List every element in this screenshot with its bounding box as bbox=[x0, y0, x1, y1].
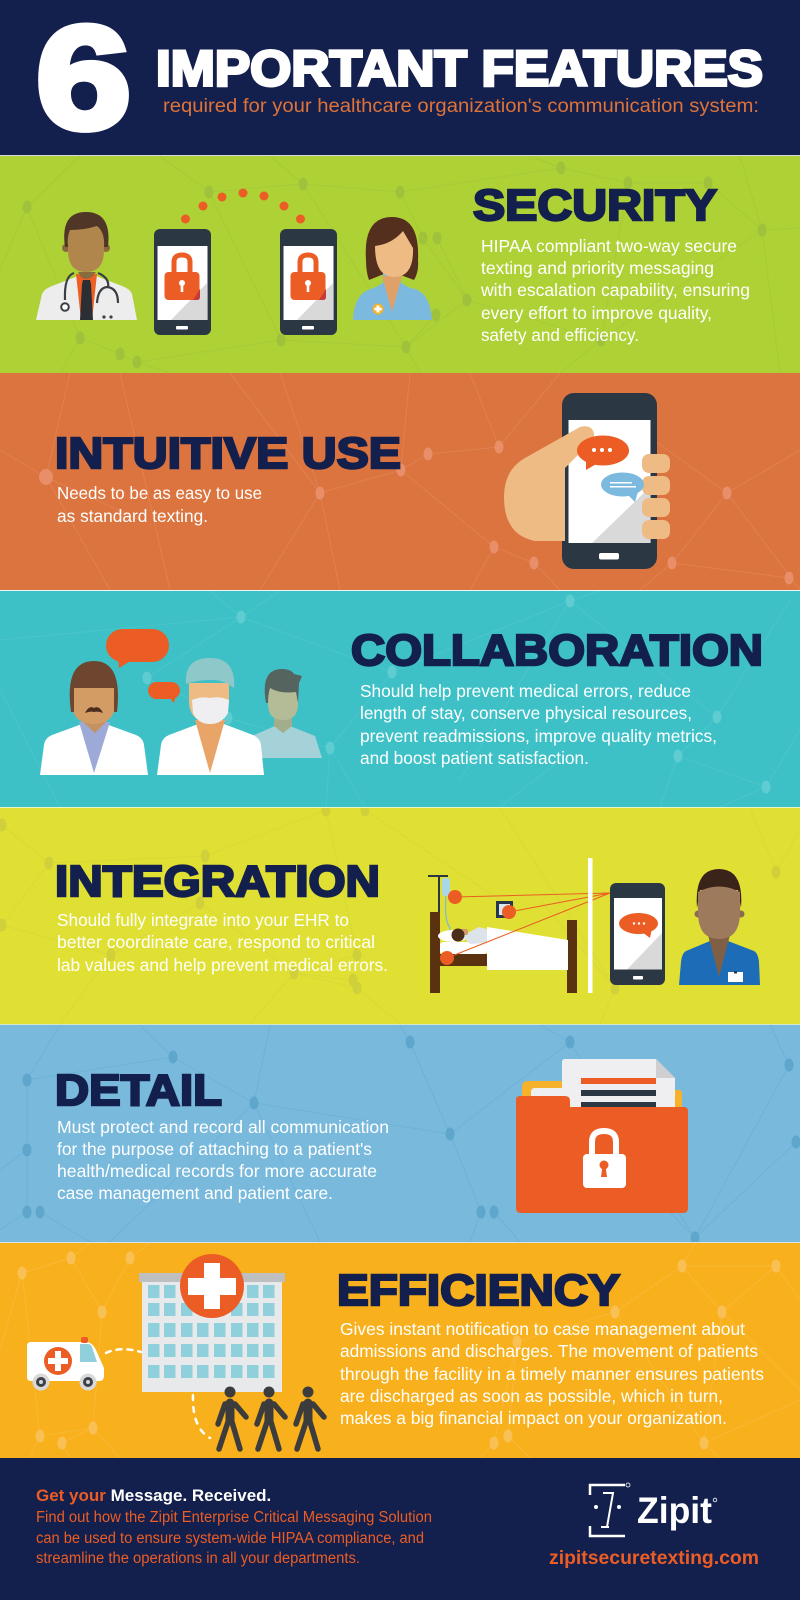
icon: locked folder bbox=[516, 1059, 688, 1213]
text: collaboration bbox=[360, 681, 717, 768]
icon: ambulance bbox=[27, 1337, 104, 1390]
text: security: with escalation capability, ensuring bbox=[480, 280, 750, 300]
icon: patient in hospital bed bbox=[428, 875, 610, 993]
faded clinician bbox=[247, 669, 322, 758]
text: security bbox=[480, 236, 750, 345]
panel: footer bbox=[0, 1458, 800, 1600]
panel: detail bbox=[0, 1024, 800, 1244]
text: integration: better coordinate care, respond to critical bbox=[57, 932, 375, 952]
icon: three walking people bbox=[218, 1386, 324, 1449]
text: efficiency: admissions and discharges. The movement of patients bbox=[340, 1341, 758, 1361]
orange chat bubble bbox=[577, 436, 629, 470]
dotted route ambulance to hospital bbox=[106, 1349, 141, 1353]
panel: collaboration bbox=[0, 590, 800, 807]
subtitle: required for your healthcare organization's communication system: bbox=[163, 96, 759, 117]
text: security: every effort to improve quality, bbox=[481, 303, 712, 323]
heading: integration: INTEGRATION bbox=[55, 857, 380, 906]
heading: intuitive use: INTUITIVE USE bbox=[55, 429, 401, 478]
text: security: texting and priority messaging bbox=[481, 258, 714, 278]
small speech bubble bbox=[148, 682, 180, 703]
icon: nurse bbox=[353, 217, 432, 320]
logo: Zipit: Zipit bbox=[637, 1490, 712, 1531]
icon: doctor bbox=[36, 212, 137, 320]
website url: zipitsecuretexting.com bbox=[549, 1547, 759, 1569]
title: IMPORTANT FEATURES bbox=[156, 40, 763, 96]
panel: integration bbox=[0, 804, 800, 1024]
heading: detail: DETAIL bbox=[55, 1066, 222, 1115]
panel: header bbox=[0, 0, 800, 159]
heading: efficiency: EFFICIENCY bbox=[337, 1266, 620, 1315]
text: detail: case management and patient care. bbox=[57, 1183, 333, 1203]
text: security: HIPAA compliant two-way secure bbox=[481, 236, 737, 256]
icon: three clinicians talking bbox=[40, 629, 322, 775]
text: collaboration: Should help prevent medical errors, reduce bbox=[360, 681, 691, 701]
icon: phone with padlock right bbox=[280, 229, 337, 335]
white divider wall bbox=[588, 858, 592, 993]
icon: phone with padlock left bbox=[154, 229, 211, 335]
text: efficiency: Gives instant notification to case management about bbox=[340, 1319, 745, 1339]
text: intuitive use: as standard texting. bbox=[57, 506, 208, 526]
clinician in surgical mask bbox=[157, 658, 264, 775]
text: efficiency bbox=[340, 1319, 764, 1428]
large speech bubble bbox=[106, 629, 169, 668]
heading: collaboration: COLLABORATION bbox=[351, 626, 763, 675]
text: collaboration: prevent readmissions, improve quality metrics, bbox=[360, 726, 717, 746]
text: intuitive use: Needs to be as easy to use bbox=[57, 483, 262, 503]
clinician with moustache bbox=[40, 661, 148, 775]
text: detail: Must protect and record all communication bbox=[57, 1117, 389, 1137]
text: integration: lab values and help prevent medical errors. bbox=[57, 955, 388, 975]
text: collaboration: and boost patient satisfaction. bbox=[360, 748, 589, 768]
text: efficiency: makes a big financial impact on your organization. bbox=[340, 1408, 727, 1428]
text: integration bbox=[57, 910, 388, 975]
panel: efficiency bbox=[0, 1242, 800, 1458]
panel: intuitive use bbox=[0, 373, 800, 590]
text: efficiency: are discharged as soon as possible, which in turn, bbox=[340, 1386, 723, 1406]
text: detail: health/medical records for more accurate bbox=[57, 1161, 377, 1181]
heading: security: SECURITY bbox=[473, 181, 717, 230]
call to action heading: Get your Message. Received. bbox=[36, 1486, 271, 1505]
text: integration: Should fully integrate into your EHR to bbox=[57, 910, 349, 930]
call to action text: Find out how the Zipit Enterprise Critical Messaging Solution bbox=[36, 1509, 432, 1526]
call to action text bbox=[36, 1509, 432, 1567]
text: security: safety and efficiency. bbox=[481, 325, 639, 345]
text: efficiency: through the facility in a timely manner ensures patients bbox=[340, 1364, 764, 1384]
icon: hospital building bbox=[139, 1254, 285, 1392]
text: detail: for the purpose of attaching to a patient's bbox=[57, 1139, 372, 1159]
logo: Zipit bbox=[590, 1483, 717, 1536]
text: collaboration: length of stay, conserve physical resources, bbox=[360, 703, 692, 723]
icon: hand holding phone bbox=[504, 393, 670, 569]
icon: phone with message bbox=[610, 883, 665, 985]
arc of dots between phones bbox=[181, 188, 305, 224]
dotted route hospital to patients bbox=[193, 1395, 210, 1438]
panel: security bbox=[0, 156, 800, 373]
blue chat bubble bbox=[601, 472, 644, 502]
call to action text: streamline the operations in all your departments. bbox=[36, 1550, 360, 1567]
text: detail bbox=[57, 1117, 389, 1203]
text: intuitive use bbox=[57, 483, 262, 526]
big number 6: 6 bbox=[36, 0, 131, 159]
call to action text: can be used to ensure system-wide HIPAA compliance, and bbox=[36, 1530, 424, 1547]
icon: nurse in blue scrubs bbox=[679, 869, 760, 985]
